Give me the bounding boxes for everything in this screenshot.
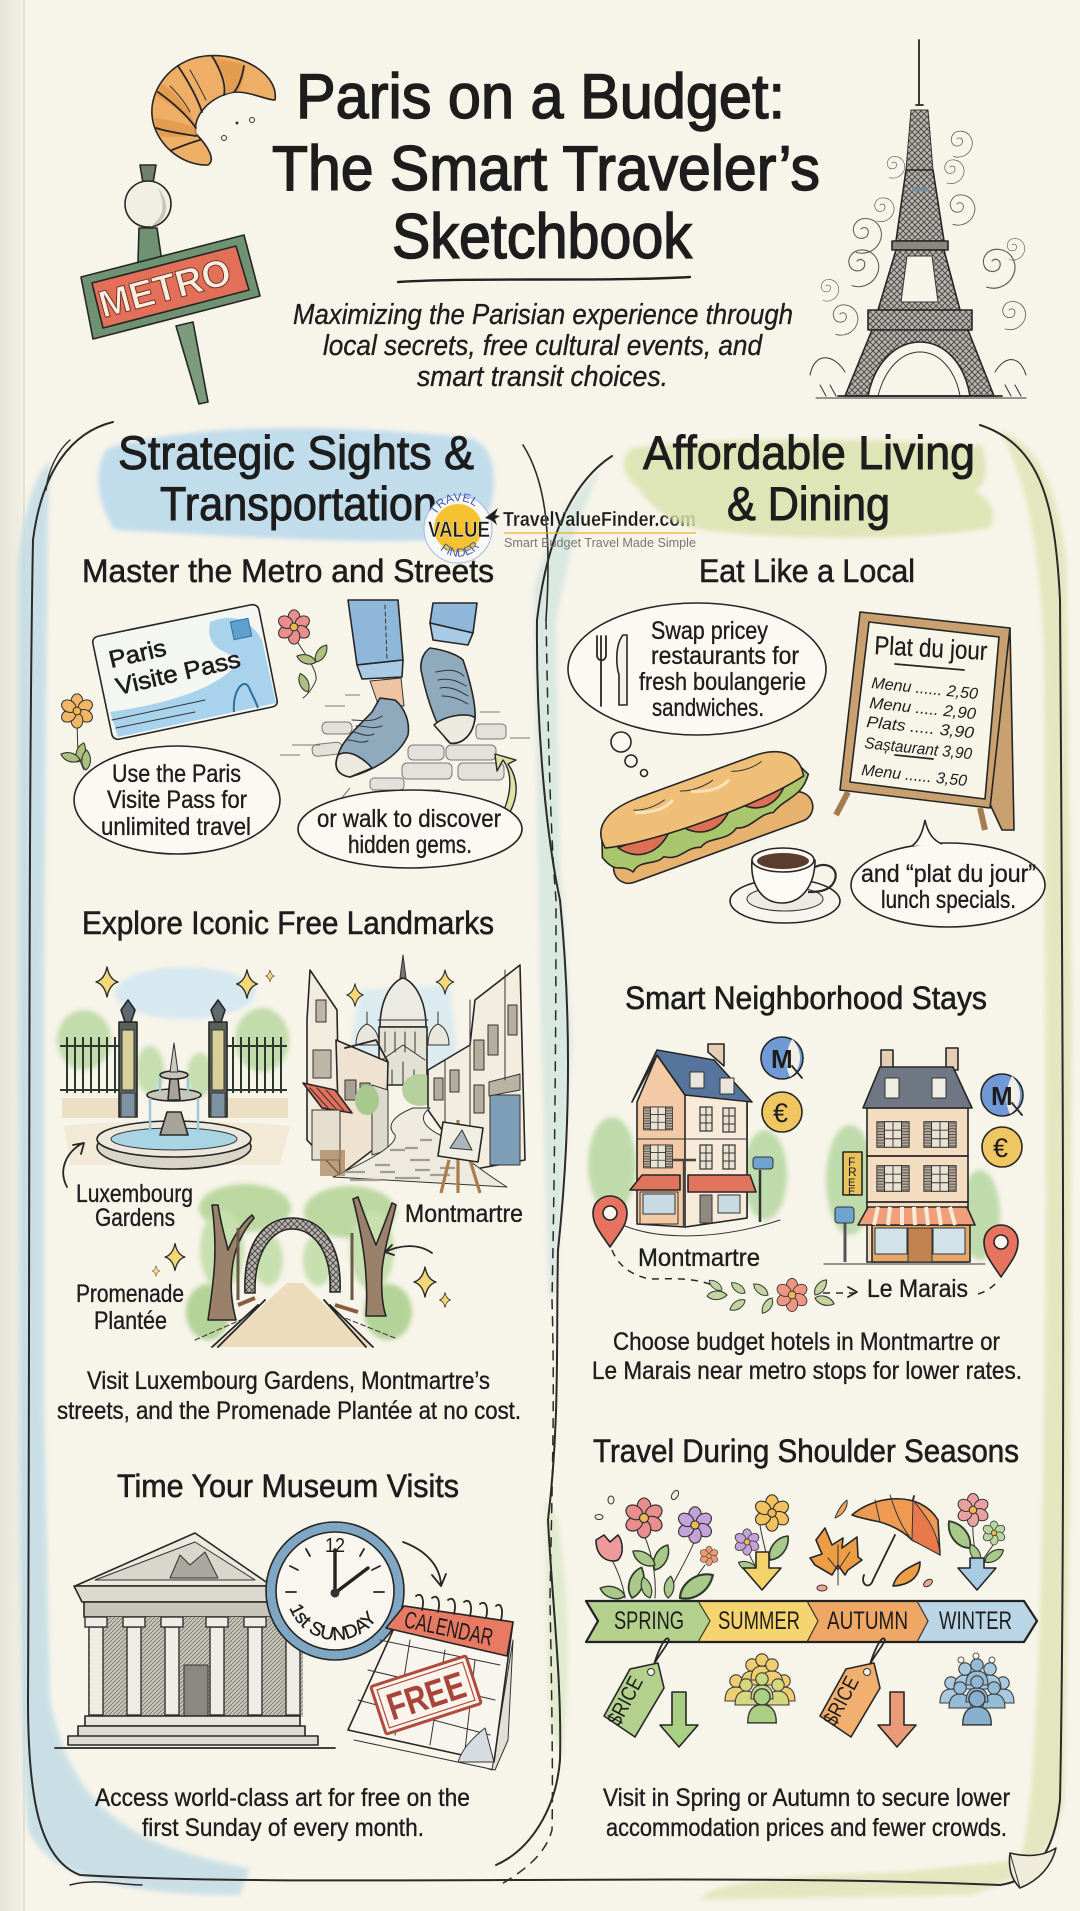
- segment: summer: [698, 1601, 818, 1642]
- heading: affordable living: Affordable Living: [643, 426, 975, 479]
- icon: orange price tag: [819, 1638, 885, 1737]
- title: The Smart Traveler’s: [272, 134, 820, 204]
- segment: winter: [917, 1601, 1037, 1642]
- icon: paris visite pass: Paris: [106, 634, 169, 674]
- icon: walking feet on cobbles: [280, 600, 530, 800]
- arrow: montmartre label to trees: [385, 1245, 432, 1255]
- text: free landmarks description: Visit Luxembourg Gardens, Montmartre’s: [87, 1367, 490, 1395]
- icon: metro marker 1: [761, 1037, 803, 1079]
- subtitle: [293, 299, 793, 393]
- icon: museum building: [55, 1533, 335, 1748]
- label: le marais: Le Marais: [867, 1275, 968, 1303]
- arrow: orange price down: [878, 1692, 916, 1747]
- callout: use the paris visite pass: unlimited travel: [101, 813, 251, 841]
- icon: plat du jour menu board: Menu ...... 2,50: [871, 675, 979, 703]
- icon: spring flowers: [595, 1489, 719, 1604]
- segment: winter: WINTER: [939, 1607, 1012, 1635]
- arrow: to luxembourg gardens: [63, 1143, 84, 1187]
- callout: swap restaurants: Swap pricey: [651, 617, 768, 645]
- arrow: green price down: [660, 1692, 698, 1747]
- icon: baguette sandwich: [587, 740, 823, 890]
- subheading: eat like a local: Eat Like a Local: [699, 553, 915, 589]
- segment: autumn: AUTUMN: [827, 1607, 908, 1635]
- label: promenade plantee: [76, 1280, 184, 1335]
- label: luxembourg gardens: Gardens: [95, 1204, 175, 1232]
- callout: walk to discover: [298, 790, 522, 868]
- subheading: metro and streets: Master the Metro and Streets: [82, 553, 494, 589]
- text: stays description: Choose budget hotels in Montmartre or: [613, 1328, 1000, 1356]
- icon: map pin montmartre: [593, 1196, 627, 1247]
- title: Paris on a Budget:: [296, 62, 785, 132]
- icon: green price tag: $RICE: [603, 1673, 648, 1729]
- callout: use the paris visite pass: [74, 746, 280, 854]
- panel: affordable living and dining: [568, 426, 1045, 1842]
- subheading: free landmarks: Explore Iconic Free Landmarks: [82, 905, 494, 941]
- icon: metro sign: [81, 165, 260, 404]
- icon: le marais house: R: [848, 1165, 857, 1179]
- logo: travel value finder: TravelValueFinder.com: [503, 509, 696, 531]
- segment: autumn: [807, 1601, 928, 1642]
- segment: summer: SUMMER: [718, 1607, 800, 1635]
- callout: walk to discover: or walk to discover: [317, 805, 501, 833]
- label: promenade plantee: Plantée: [94, 1307, 167, 1335]
- title: [272, 62, 820, 282]
- icon: calendar with free stamp: [348, 1595, 513, 1770]
- callout: swap restaurants: fresh boulangerie: [639, 668, 806, 696]
- callout: plat du jour: lunch specials.: [881, 886, 1016, 914]
- title: Sketchbook: [392, 202, 692, 272]
- subtitle: local secrets, free cultural events, and: [323, 330, 763, 362]
- icon: green price tag: [603, 1638, 669, 1737]
- chart: season timeline: [586, 1601, 1037, 1642]
- icon: summer flowers and arrow: [733, 1495, 793, 1590]
- page curl: [1009, 1848, 1056, 1888]
- icon: euro marker 2: €: [993, 1133, 1008, 1163]
- icon: winter flowers and arrow: [943, 1493, 1006, 1590]
- icon: euro marker 1: [762, 1092, 802, 1132]
- illustration: promenade plantee: [152, 1184, 450, 1347]
- arrow: clock to calendar: [403, 1542, 446, 1586]
- icon: autumn leaf: [810, 1528, 862, 1585]
- logo: travel value finder: Smart Budget Travel Made Simple: [504, 535, 696, 550]
- subheading: neighborhood stays: Smart Neighborhood Stays: [625, 980, 987, 1016]
- icon: metro marker 1: M: [771, 1044, 793, 1074]
- icon: eiffel tower: [810, 40, 1026, 398]
- text: museum description: Access world-class art for free on the: [95, 1784, 470, 1812]
- text: seasons description: accommodation prices and fewer crowds.: [606, 1814, 1007, 1842]
- icon: plat du jour menu board: Menu ...... 3,50: [861, 762, 968, 790]
- icon: umbrella: [817, 1495, 940, 1591]
- logo: travel value finder: VALUE: [428, 517, 490, 542]
- panel frames: [28, 422, 1063, 1885]
- icon: clock: 1st SUNDAY: [290, 1604, 374, 1640]
- heading: strategic sights: [98, 426, 494, 541]
- icon: montmartre house: [588, 1044, 787, 1236]
- icon: plat du jour menu board: Plats ..... 3,90: [866, 714, 975, 742]
- illustration: montmartre street: [303, 955, 525, 1193]
- callout: plat du jour: and “plat du jour”: [861, 860, 1036, 888]
- icon: metro marker 2: [981, 1074, 1023, 1116]
- heading: affordable living: & Dining: [727, 477, 890, 530]
- icon: coffee cup: [730, 848, 840, 923]
- icon: metro sign: METRO: [94, 251, 236, 327]
- callout: swap restaurants: [568, 603, 826, 776]
- icon: blue crowd: [940, 1653, 1014, 1725]
- icon: plat du jour menu board: Plat du jour: [874, 630, 988, 666]
- icon: orange flower: [59, 694, 95, 770]
- arrow: walk to cobbles: [495, 754, 516, 812]
- icon: calendar with free stamp: FREE: [382, 1665, 471, 1729]
- label: montmartre: Montmartre: [405, 1200, 523, 1228]
- subtitle: smart transit choices.: [417, 361, 668, 393]
- icon: euro marker 2: [982, 1127, 1022, 1167]
- text: free landmarks description: [57, 1367, 521, 1425]
- heading: strategic sights: Strategic Sights &: [118, 426, 474, 479]
- icon: euro marker 1: €: [773, 1098, 788, 1128]
- subheading: shoulder seasons: Travel During Shoulder Seasons: [593, 1433, 1019, 1469]
- icon: le marais house: E: [848, 1177, 855, 1189]
- icon: calendar with free stamp: CALENDAR: [402, 1606, 495, 1652]
- icon: orange price tag: $RICE: [819, 1673, 864, 1729]
- icon: clock: 12: [325, 1535, 345, 1557]
- subtitle: Maximizing the Parisian experience through: [293, 299, 793, 331]
- label: luxembourg gardens: Luxembourg: [76, 1180, 193, 1208]
- text: museum description: [95, 1784, 470, 1842]
- segment: spring: [586, 1601, 710, 1642]
- segment: spring: SPRING: [614, 1607, 684, 1635]
- text: free landmarks description: streets, and the Promenade Plantée at no cost.: [57, 1397, 521, 1425]
- text: seasons description: [603, 1784, 1010, 1842]
- text: museum description: first Sunday of every month.: [142, 1814, 424, 1842]
- logo: travel value finder: FINDER: [440, 542, 480, 557]
- label: montmartre neighborhood: Montmartre: [638, 1244, 760, 1272]
- watercolor washes: [18, 430, 1072, 1900]
- text: seasons description: Visit in Spring or Autumn to secure lower: [603, 1784, 1010, 1812]
- logo: travel value finder: TRAVEL: [429, 492, 476, 513]
- icon: le marais house: [824, 1048, 1000, 1264]
- icon: plat du jour menu board: Saștaurant 3,90: [864, 735, 973, 763]
- icon: paris visite pass: [93, 605, 277, 739]
- icon: plat du jour menu board: [836, 612, 1014, 830]
- subheading: museum visits: Time Your Museum Visits: [117, 1468, 459, 1504]
- logo: travel value finder: [424, 492, 696, 564]
- icon: croissant: [152, 56, 275, 165]
- label: luxembourg gardens: [76, 1180, 193, 1232]
- heading: affordable living: [624, 426, 993, 538]
- panel: strategic sights and transportation: [54, 426, 530, 1842]
- icon: map pin le marais: [984, 1225, 1018, 1277]
- icon: yellow crowd: [725, 1654, 795, 1723]
- callout: swap restaurants: sandwiches.: [652, 694, 764, 722]
- text: stays description: Le Marais near metro stops for lower rates.: [592, 1357, 1022, 1385]
- text: stays description: [592, 1328, 1022, 1385]
- route: dashed path with floral sprig: [612, 1250, 998, 1315]
- callout: swap restaurants: restaurants for: [651, 642, 799, 670]
- icon: plat du jour menu board: Menu ..... 2,90: [869, 695, 977, 723]
- icon: paris visite pass: Visite Pass: [113, 646, 243, 701]
- illustration: luxembourg gardens: [57, 967, 290, 1169]
- icon: pink flower: [276, 610, 330, 698]
- icon: clock: [265, 1521, 405, 1661]
- callout: plat du jour: [851, 820, 1045, 927]
- icon: metro marker 2: M: [991, 1081, 1013, 1111]
- heading: strategic sights: Transportation: [160, 477, 437, 530]
- label: promenade plantee: Promenade: [76, 1280, 184, 1308]
- icon: le marais house: F: [848, 1155, 855, 1169]
- callout: walk to discover: hidden gems.: [348, 831, 472, 859]
- icon: le marais house: E: [848, 1186, 855, 1198]
- callout: use the paris visite pass: Use the Paris: [112, 760, 241, 788]
- callout: use the paris visite pass: Visite Pass for: [107, 786, 247, 814]
